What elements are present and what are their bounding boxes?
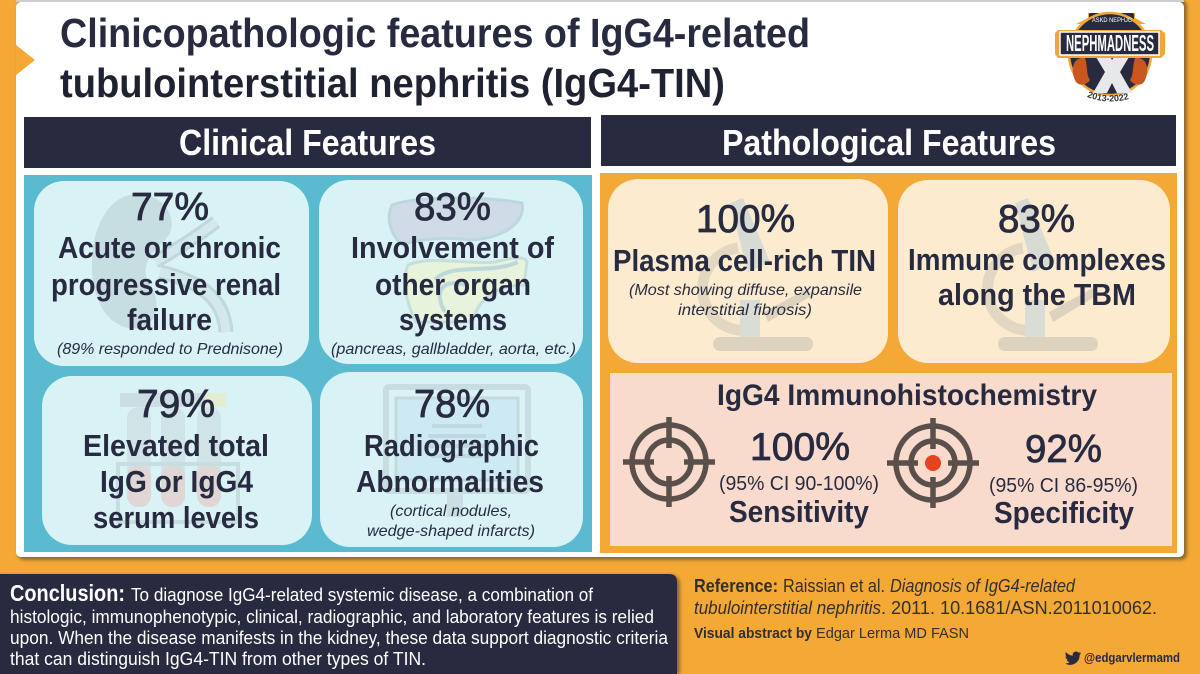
- card: radiographic: [320, 372, 583, 547]
- panel: conclusion: [0, 574, 677, 674]
- reference text block: Raissian et al.: [783, 576, 885, 596]
- card: other organs: systems: [399, 302, 507, 337]
- card: radiographic: Abnormalities: [356, 464, 544, 499]
- icon: NephMadness X logo: 2013-2022: [1087, 92, 1129, 102]
- card: IgG4 immunohistochemistry: (95% CI 86-95%): [989, 475, 1138, 497]
- card: renal failure: 77%: [131, 186, 209, 229]
- credit line: Edgar Lerma MD FASN: [816, 625, 969, 642]
- title: Clinicopathologic features of IgG4-related: [60, 10, 810, 56]
- card: renal failure: (89% responded to Prednisone): [57, 341, 283, 358]
- card: immune complexes: along the TBM: [938, 277, 1136, 312]
- icon: test tubes watermark: [118, 393, 238, 522]
- icon: NephMadness X logo: ASKD NEPHJC: [1092, 17, 1132, 24]
- title: tubulointerstitial nephritis (IgG4-TIN): [60, 60, 725, 106]
- panel: conclusion: upon. When the disease manifests in the kidney, these data support diagnostic criteria: [10, 628, 669, 648]
- icon: twitter bird: [1065, 652, 1081, 665]
- icon: microscope watermark: [703, 198, 813, 351]
- card: IgG4 immunohistochemistry: 92%: [1025, 428, 1102, 471]
- panel: conclusion: Conclusion:: [10, 580, 125, 606]
- heading: Clinical Features: [24, 117, 591, 168]
- icon: target, specificity: [887, 418, 979, 508]
- icon: x-ray watermark: [386, 387, 528, 517]
- card: plasma cell-rich TIN: 100%: [696, 198, 795, 241]
- icon: orange title notch: [16, 45, 35, 75]
- panel: pathological features: [600, 173, 1177, 553]
- card: plasma cell-rich TIN: [608, 179, 888, 363]
- reference text block: . 2011. 10.1681/ASN.2011010062.: [881, 598, 1157, 618]
- title: [60, 10, 810, 106]
- credit line: [694, 625, 969, 642]
- card: IgG4 immunohistochemistry: 100%: [750, 426, 850, 469]
- card: radiographic: (cortical nodules,: [390, 503, 512, 520]
- icon: kidney watermark: [92, 194, 226, 332]
- card: IgG4 immunohistochemistry: [610, 373, 1172, 546]
- reference text block: Diagnosis of IgG4-related: [890, 576, 1076, 596]
- card: IgG4 immunohistochemistry: (95% CI 90-100%): [719, 473, 879, 495]
- credit line: Visual abstract by: [694, 625, 813, 642]
- card: serum levels: serum levels: [93, 500, 259, 535]
- icon: microscope watermark: [988, 198, 1098, 351]
- card: other organs: [319, 180, 583, 364]
- reference text block: tubulointerstitial nephritis: [694, 598, 881, 618]
- card: plasma cell-rich TIN: Plasma cell-rich TIN: [613, 243, 876, 278]
- icon: target, sensitivity: [623, 417, 715, 507]
- card: IgG4 immunohistochemistry: IgG4 Immunohistochemistry: [717, 379, 1097, 412]
- icon: organs watermark: [389, 198, 527, 322]
- card: radiographic: Radiographic: [364, 428, 539, 463]
- card: renal failure: failure: [127, 302, 212, 337]
- card: radiographic: 78%: [414, 383, 490, 426]
- card: serum levels: 79%: [137, 383, 215, 426]
- card: serum levels: [42, 376, 312, 545]
- card: serum levels: Elevated total: [83, 428, 269, 463]
- panel: conclusion: To diagnose IgG4-related systemic disease, a combination of: [131, 585, 594, 605]
- heading: Pathological Features: [601, 115, 1176, 166]
- card: other organs: Involvement of: [351, 230, 555, 265]
- card: other organs: (pancreas, gallbladder, aorta, etc.): [331, 341, 576, 358]
- card: radiographic: wedge-shaped infarcts): [367, 523, 535, 540]
- card: renal failure: progressive renal: [51, 267, 281, 302]
- card: immune complexes: Immune complexes: [908, 242, 1166, 277]
- icon: NephMadness X logo: [1055, 12, 1165, 102]
- card: immune complexes: 83%: [998, 198, 1075, 241]
- card: IgG4 immunohistochemistry: Sensitivity: [729, 494, 870, 529]
- heading: Clinical Features: Clinical Features: [179, 122, 436, 163]
- card: IgG4 immunohistochemistry: Specificity: [994, 495, 1135, 530]
- card: serum levels: IgG or IgG4: [100, 464, 254, 499]
- reference text block: Reference:: [694, 576, 778, 596]
- card: immune complexes: [898, 180, 1170, 363]
- card: renal failure: Acute or chronic: [58, 230, 281, 265]
- reference text block: [694, 576, 1157, 618]
- twitter handle: @edgarvlermamd: [1084, 650, 1180, 665]
- panel: conclusion: histologic, immunophenotypic, clinical, radiographic, and laboratory features is relied: [10, 607, 654, 627]
- heading: Pathological Features: Pathological Features: [722, 122, 1056, 163]
- card: other organs: 83%: [414, 186, 491, 229]
- panel: conclusion: that can distinguish IgG4-TIN from other types of TIN.: [10, 649, 426, 669]
- card: plasma cell-rich TIN: (Most showing diffuse, expansile: [629, 282, 862, 299]
- card: renal failure: [34, 181, 309, 366]
- card: other organs: other organ: [375, 267, 531, 302]
- panel: clinical features: [24, 175, 592, 552]
- card: plasma cell-rich TIN: interstitial fibrosis): [678, 302, 812, 319]
